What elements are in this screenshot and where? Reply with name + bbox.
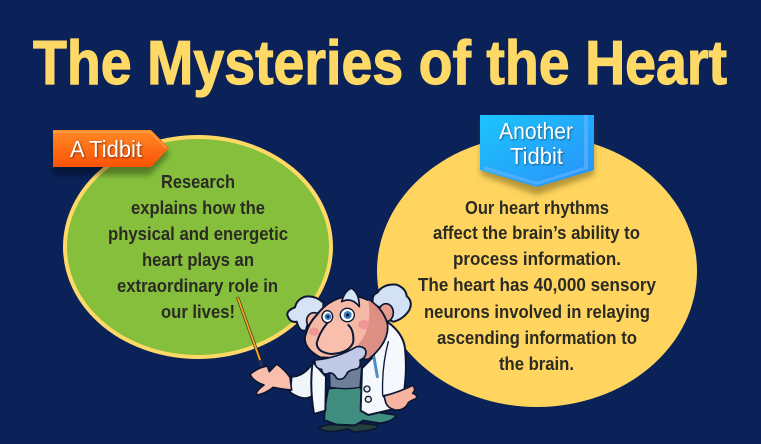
arm sleeve left xyxy=(290,363,313,398)
green ellipse xyxy=(65,137,331,357)
head xyxy=(305,296,388,359)
head shade xyxy=(355,300,387,358)
label: a tidbit: A Tidbit xyxy=(70,136,143,162)
beard xyxy=(315,347,366,379)
panel: another tidbit bubble xyxy=(377,135,697,407)
eyes xyxy=(322,311,333,323)
hair right xyxy=(373,284,411,322)
tidbit text: extraordinary role in xyxy=(117,276,278,296)
another tidbit text: The heart has 40,000 sensory xyxy=(418,275,656,295)
tidbit text: our lives! xyxy=(161,302,235,322)
left hand xyxy=(250,364,292,395)
pocket pen xyxy=(374,357,377,377)
tidbit text: heart plays an xyxy=(142,250,254,270)
another tidbit text xyxy=(418,198,656,374)
tidbit text: physical and energetic xyxy=(108,224,288,244)
label: another tidbit: Another xyxy=(499,118,573,144)
shoes xyxy=(319,423,378,432)
label: a tidbit xyxy=(53,130,170,175)
vest xyxy=(329,367,362,389)
right coat panel xyxy=(361,322,406,415)
another tidbit text: neurons involved in relaying xyxy=(424,302,650,322)
tidbit text: Research xyxy=(161,172,235,192)
another tidbit text: ascending information to xyxy=(437,328,637,348)
left coat panel xyxy=(311,362,326,414)
cheeks xyxy=(309,327,319,336)
sleeve crease xyxy=(383,342,388,395)
nose xyxy=(317,318,353,354)
panel: a tidbit bubble xyxy=(65,137,331,357)
yellow ellipse xyxy=(377,135,697,407)
hair top xyxy=(342,288,359,307)
label: another tidbit xyxy=(480,115,594,195)
tidbit text xyxy=(108,172,288,322)
coat buttons xyxy=(364,386,370,392)
another tidbit text: process information. xyxy=(453,249,621,269)
another tidbit text: the brain. xyxy=(499,354,574,374)
trousers xyxy=(324,387,397,425)
ear right xyxy=(379,304,393,322)
ear left xyxy=(307,313,321,329)
icon: professor character with pointer xyxy=(238,284,417,432)
right hand xyxy=(384,385,417,410)
pointer xyxy=(238,298,261,362)
label: another tidbit: Tidbit xyxy=(510,143,564,169)
hair left xyxy=(287,296,323,331)
another tidbit text: affect the brain’s ability to xyxy=(433,223,640,243)
tidbit text: explains how the xyxy=(131,198,265,218)
another tidbit text: Our heart rhythms xyxy=(465,198,609,218)
